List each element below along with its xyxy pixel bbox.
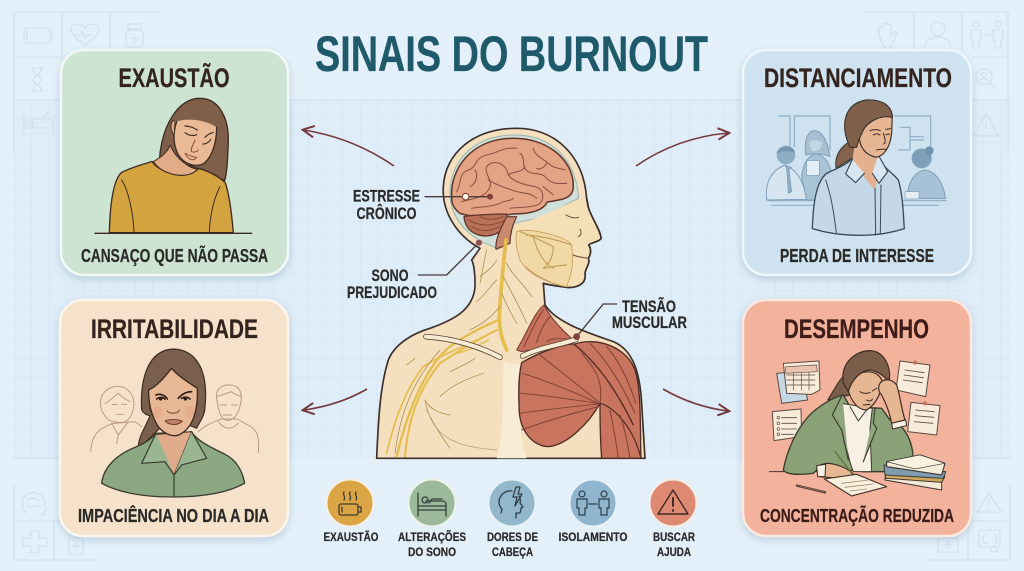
illustration: overwhelmed woman at desk xyxy=(769,351,946,496)
panel: irritabilidade xyxy=(60,300,288,536)
legend: alterações do sono: ALTERAÇÕES xyxy=(398,529,466,544)
icon: warning triangle xyxy=(658,490,688,514)
panel: exaustão xyxy=(61,50,288,275)
muscle fibres: pectoral xyxy=(519,355,599,430)
brain xyxy=(452,138,573,216)
legend: exaustão: EXAUSTÃO xyxy=(324,529,378,544)
illustration: exhausted woman xyxy=(95,98,252,233)
leader lines and dots xyxy=(418,197,617,337)
nerves xyxy=(387,240,507,457)
caption: perda de interesse: PERDA DE INTERESSE xyxy=(780,245,934,266)
arrow: to distanciamento xyxy=(636,133,728,166)
cerebellum xyxy=(464,214,507,236)
arrow: to exaustão xyxy=(304,130,394,166)
legend: exaustão xyxy=(324,480,378,544)
arrow: to desempenho xyxy=(663,389,728,411)
label: tensão muscular xyxy=(612,296,687,332)
clavicle right xyxy=(523,339,576,356)
panel: distanciamento xyxy=(743,50,971,275)
label: sono prejudicado: PREJUDICADO xyxy=(347,284,437,302)
anatomy figure xyxy=(377,128,645,458)
label: estresse crônico xyxy=(353,188,420,223)
panel: desempenho xyxy=(743,300,971,536)
caption: concentração reduzida: CONCENTRAÇÃO REDUZIDA xyxy=(760,505,954,526)
legend: buscar ajuda: BUSCAR xyxy=(653,530,695,544)
sternum xyxy=(497,362,527,458)
skull fluid xyxy=(450,135,579,248)
caption: impaciência: IMPACIÊNCIA NO DIA A DIA xyxy=(78,505,269,526)
label: sono prejudicado xyxy=(347,267,437,302)
legend: isolamento xyxy=(558,480,628,544)
brain stem xyxy=(496,217,517,249)
legend: buscar ajuda: AJUDA xyxy=(657,545,691,559)
illustration: detached woman and colleagues xyxy=(766,100,947,235)
muscle fibres: deltoid xyxy=(575,343,641,458)
background icon grid: bottom right xyxy=(928,485,1010,560)
heading: exaustão: EXAUSTÃO xyxy=(118,62,230,93)
label: sono prejudicado: SONO xyxy=(372,267,409,285)
caption: cansaço: CANSAÇO QUE NÃO PASSA xyxy=(81,245,268,266)
legend: dores de cabeça xyxy=(487,480,538,559)
face xyxy=(513,199,601,287)
label: estresse crônico: CRÔNICO xyxy=(356,204,417,223)
heading: irritabilidade: IRRITABILIDADE xyxy=(91,314,258,344)
label: tensão muscular: TENSÃO xyxy=(622,296,676,316)
legend: alterações do sono: DO SONO xyxy=(408,545,456,559)
title: SINAIS DO BURNOUT xyxy=(315,26,708,82)
background icon grid: bottom left xyxy=(14,485,96,560)
icon: two people apart xyxy=(577,491,609,515)
body silhouette xyxy=(377,128,645,458)
icon: bed xyxy=(418,493,446,516)
clavicle left xyxy=(426,337,500,357)
jaw nerve area xyxy=(516,230,573,287)
label: estresse crônico: ESTRESSE xyxy=(353,188,420,206)
legend: dores de cabeça: DORES DE xyxy=(487,530,538,544)
muscle: neck xyxy=(517,305,575,352)
label: tensão muscular: MUSCULAR xyxy=(612,314,687,332)
muscle: shoulder base xyxy=(519,342,641,458)
illustration: irritated woman with people behind xyxy=(91,349,259,497)
icon: low battery with steam xyxy=(339,492,361,515)
heading: desempenho: DESEMPENHO xyxy=(784,314,929,344)
heading: distanciamento: DISTANCIAMENTO xyxy=(764,63,952,93)
legend: dores de cabeça: CABEÇA xyxy=(492,545,533,559)
legend: buscar ajuda xyxy=(650,480,696,559)
chest contour xyxy=(425,400,497,450)
background icon grid: top left xyxy=(14,12,158,150)
legend: isolamento: ISOLAMENTO xyxy=(558,530,628,544)
background icon grid: top right xyxy=(866,12,1008,150)
legend: alterações do sono xyxy=(398,480,466,559)
arrow: to irritabilidade xyxy=(304,389,367,410)
icon: head with lightning xyxy=(499,487,523,518)
